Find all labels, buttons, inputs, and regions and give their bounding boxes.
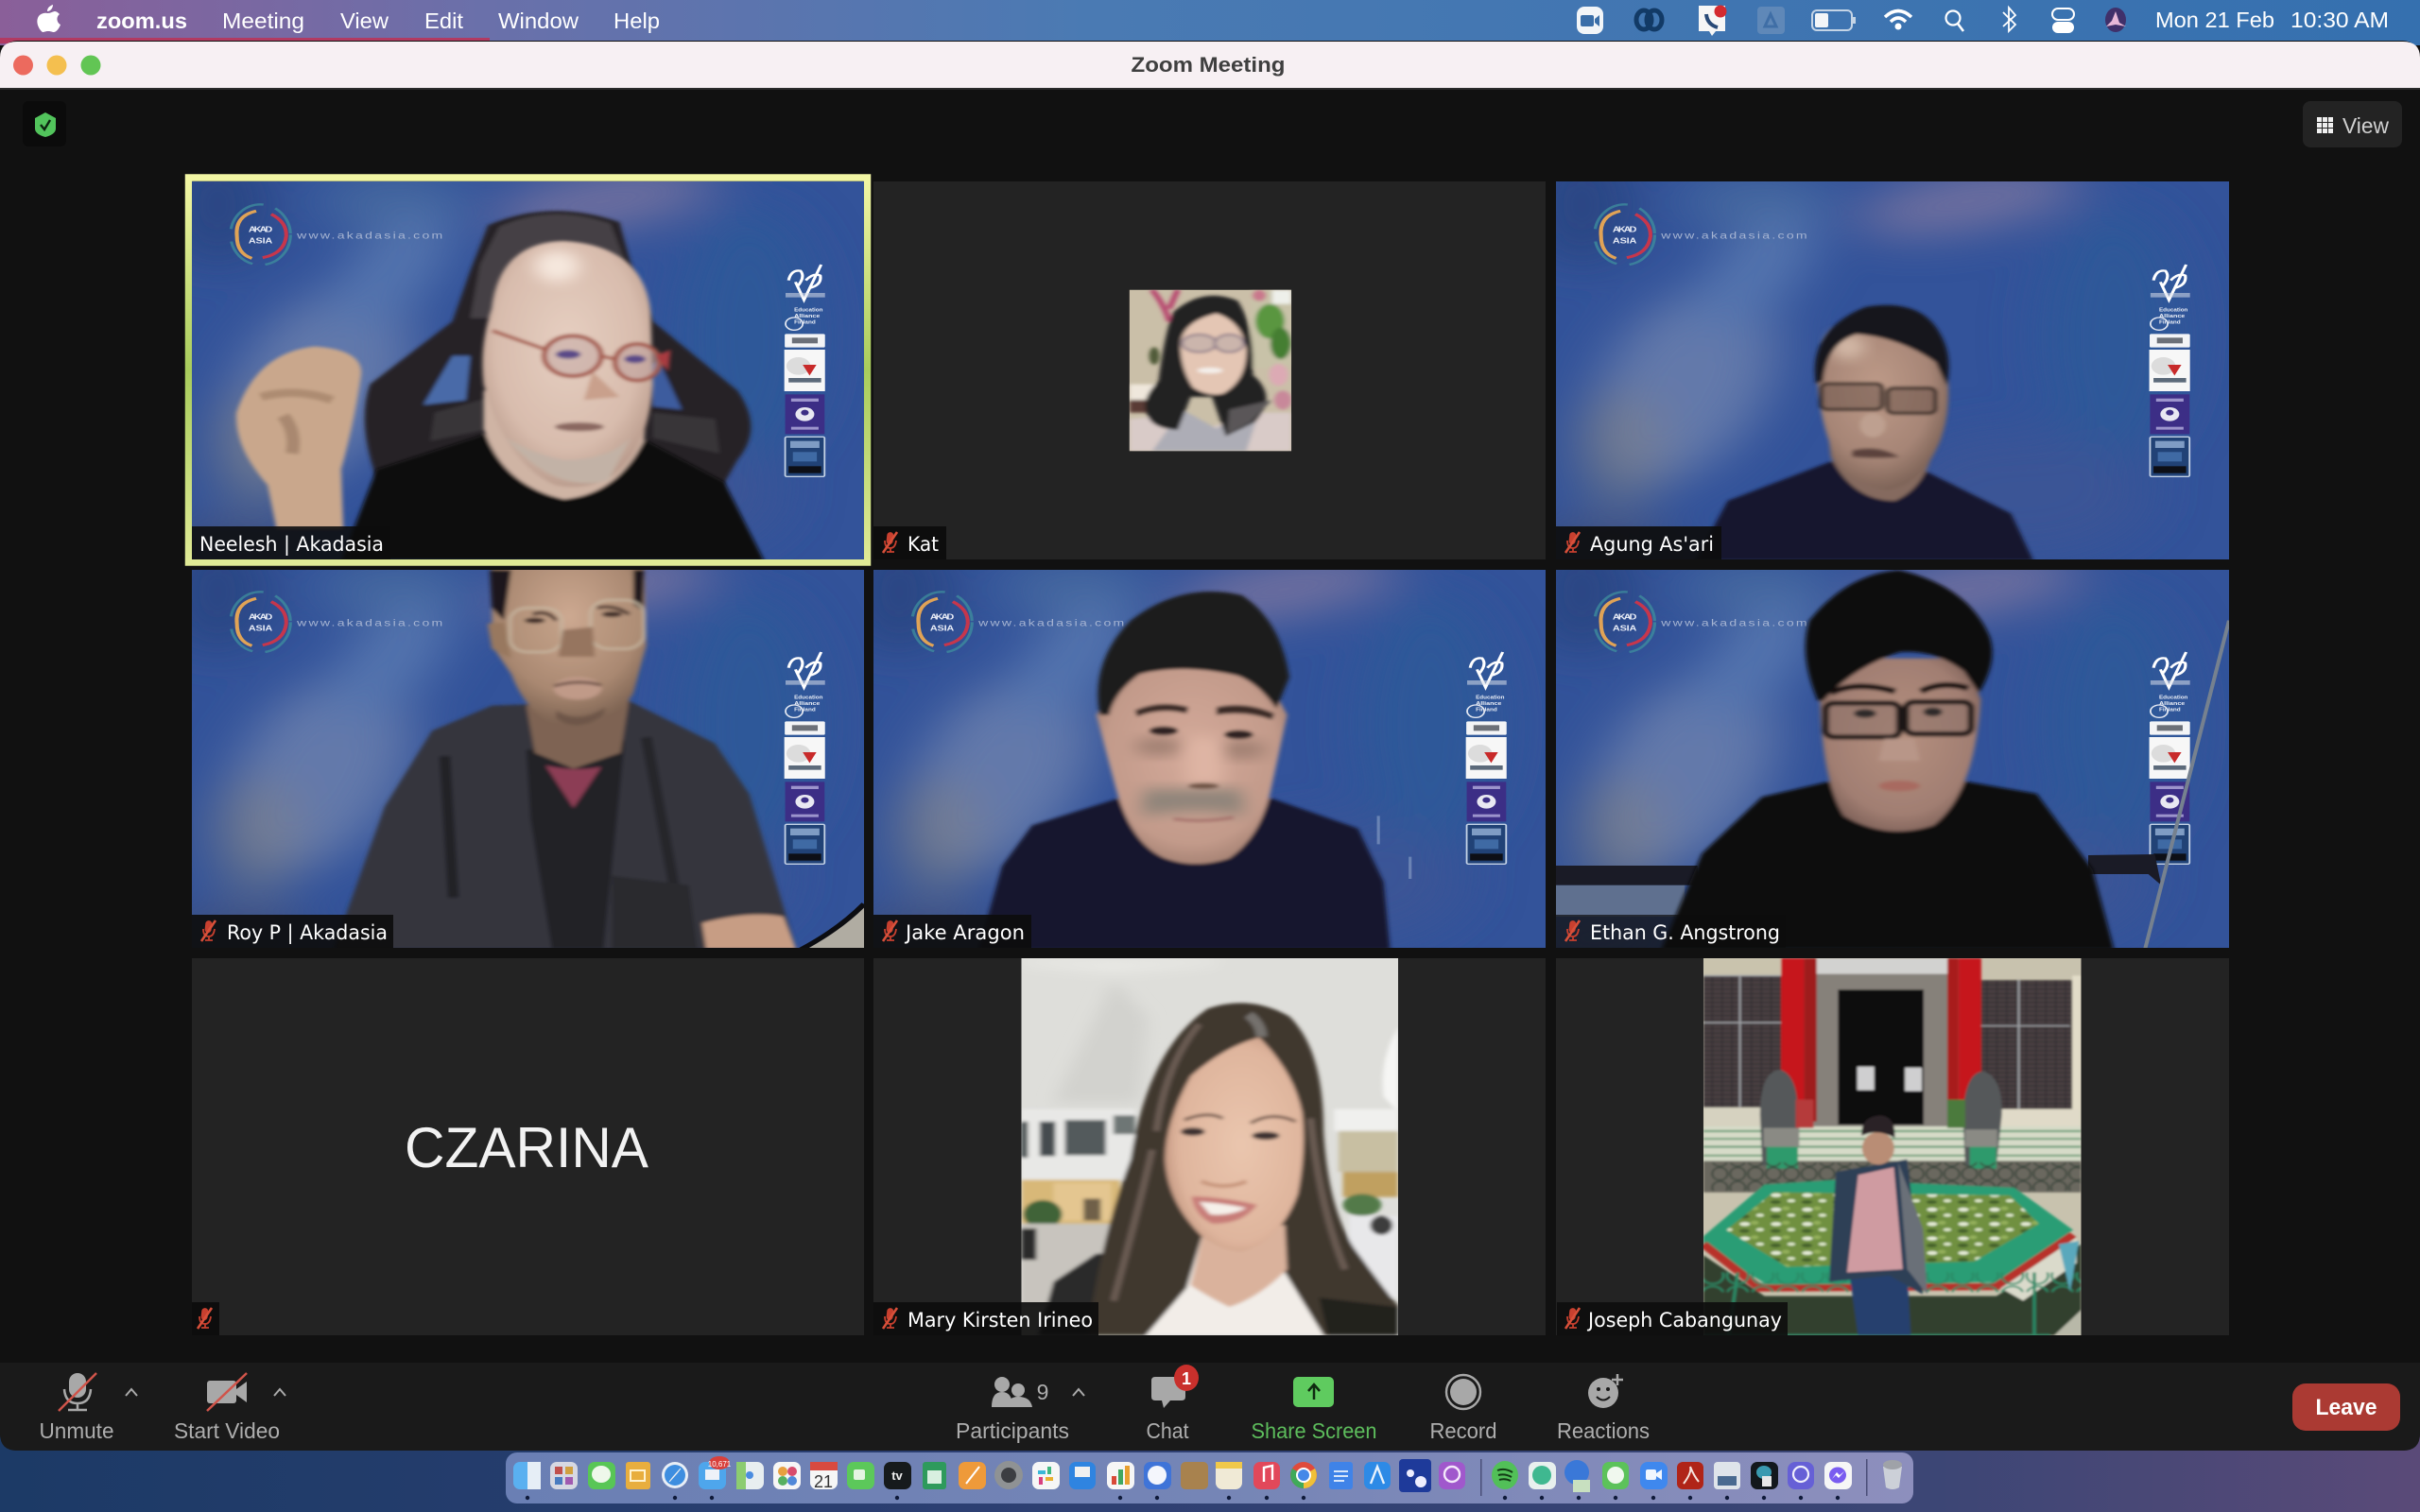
tile: Joseph	[1556, 955, 2229, 1338]
tile: Czarina (camera off)	[192, 958, 864, 1335]
name tag: Ethan G. Angstrong	[1590, 921, 1780, 944]
share screen control: Share Screen	[1252, 1418, 1376, 1443]
name tag	[1556, 526, 1721, 559]
video: Ethan: www.akadasia.com	[1660, 617, 1807, 628]
video: Agung: www.akadasia.com	[1660, 230, 1807, 241]
name tag	[1557, 1302, 1788, 1335]
photo: Mary	[1021, 958, 1398, 1335]
participants control: Participants	[956, 1418, 1069, 1443]
unmute control	[40, 1373, 137, 1443]
video: Agung: ASIA	[1613, 237, 1636, 246]
name tag	[873, 526, 946, 559]
chat control	[1146, 1365, 1199, 1443]
menu items	[96, 9, 660, 33]
desktop wallpaper	[0, 1418, 2420, 1512]
menu items: Window	[498, 9, 579, 33]
video: Agung: Finland	[2159, 319, 2181, 325]
chat control: 1	[1182, 1369, 1191, 1388]
active speaker border	[189, 178, 868, 562]
name tag: muted icon	[192, 1302, 219, 1335]
video: Roy: ASIA	[249, 625, 272, 633]
start video control	[174, 1373, 285, 1443]
tile: Roy	[145, 529, 869, 967]
view button: View	[2342, 113, 2389, 138]
video: Ethan: Education	[2159, 695, 2187, 700]
video: Jake: Education	[1476, 695, 1504, 700]
macOS menu bar	[0, 0, 2420, 45]
menu items: Help	[614, 9, 660, 33]
video: Joseph	[1556, 958, 2229, 1335]
participant name: CZARINA	[405, 1116, 648, 1179]
view button	[2303, 101, 2402, 147]
leave button: Leave	[2316, 1395, 2377, 1420]
video: Agung: AKAD	[1613, 226, 1636, 234]
video: Jake: AKAD	[930, 613, 954, 622]
title bar: Zoom Meeting	[1131, 53, 1286, 77]
name tag	[873, 915, 1031, 948]
name tag	[873, 1302, 1098, 1335]
video: Neelesh	[192, 181, 897, 559]
video: Kat	[873, 181, 1546, 559]
macOS dock	[506, 1452, 1913, 1503]
tile: Kat	[873, 180, 1546, 562]
video: Roy: Education	[794, 695, 822, 700]
menu items: Meeting	[222, 9, 304, 33]
video: Roy: www.akadasia.com	[296, 617, 442, 628]
video: Roy	[192, 570, 864, 948]
video: Roy: AKAD	[249, 613, 272, 622]
participants control	[956, 1377, 1084, 1443]
video: Neelesh: Alliance	[794, 314, 821, 319]
date and time: Mon 21 Feb	[2155, 8, 2274, 32]
menu items: Edit	[424, 9, 464, 33]
video: Neelesh: Education	[794, 307, 822, 313]
menu items: View	[340, 9, 389, 33]
menu items: zoom.us	[96, 9, 187, 33]
start video control: Start Video	[174, 1418, 280, 1443]
title bar	[0, 42, 2420, 90]
tile: Ethan	[1509, 529, 2234, 967]
name tag: Jake Aragon	[904, 921, 1025, 944]
name tag: Joseph Cabangunay	[1586, 1309, 1782, 1332]
icon: apple logo	[37, 5, 60, 32]
name tag	[192, 915, 393, 948]
video: Roy: Finland	[794, 707, 816, 713]
bottom toolbar	[0, 1363, 2420, 1451]
name tag: Kat	[908, 533, 939, 556]
tile: Mary	[873, 955, 1546, 1338]
video: Neelesh: ASIA	[249, 237, 272, 246]
tile: Jake	[826, 529, 1550, 967]
video: Ethan: Alliance	[2159, 701, 2185, 707]
name tag: Roy P | Akadasia	[227, 921, 388, 945]
name tag	[1556, 915, 1786, 948]
video: Neelesh: www.akadasia.com	[296, 230, 442, 241]
video: Neelesh: Finland	[794, 319, 816, 325]
video: Jake: ASIA	[930, 625, 954, 633]
video: Mary	[873, 958, 1546, 1335]
video: Ethan: ASIA	[1613, 625, 1636, 633]
video: Agung	[1556, 181, 2229, 559]
video: Ethan	[1556, 570, 2229, 948]
chat control: Chat	[1146, 1418, 1189, 1443]
tile: Agung	[1509, 142, 2234, 579]
name tag: Neelesh | Akadasia	[199, 533, 384, 557]
record control: Record	[1429, 1418, 1497, 1443]
dock badges and running indicators	[526, 1460, 1840, 1500]
video: Neelesh: AKAD	[249, 226, 272, 234]
date and time: 10:30 AM	[2290, 8, 2389, 32]
video: Ethan: AKAD	[1613, 613, 1636, 622]
reactions control	[1557, 1374, 1650, 1443]
name tag	[192, 526, 390, 559]
video: Jake: Finland	[1476, 707, 1497, 713]
icon: security shield	[23, 101, 66, 146]
video: Ethan: Finland	[2159, 707, 2181, 713]
dock icons	[513, 1456, 1902, 1496]
dock icons: tv	[891, 1469, 904, 1483]
dock icons: 21	[814, 1472, 833, 1491]
participants control: 9	[1037, 1380, 1048, 1404]
video: Jake	[873, 570, 1546, 948]
share screen control	[1252, 1377, 1376, 1443]
unmute control: Unmute	[40, 1418, 113, 1443]
video: Agung: Education	[2159, 307, 2187, 313]
name tag: Mary Kirsten Irineo	[908, 1309, 1093, 1332]
date and time	[2155, 8, 2389, 32]
video: Agung: Alliance	[2159, 314, 2185, 319]
name tag: Agung As'ari	[1590, 533, 1714, 556]
reactions control: Reactions	[1557, 1418, 1650, 1443]
dock badges and running indicators: 10,671	[708, 1460, 732, 1469]
video: Jake: www.akadasia.com	[977, 617, 1124, 628]
status bar icons	[1577, 6, 2126, 36]
video: Jake: Alliance	[1476, 701, 1502, 707]
leave button	[2292, 1383, 2400, 1431]
active speaker tile: Neelesh	[145, 142, 869, 579]
video: Roy: Alliance	[794, 701, 821, 707]
photo: Joseph	[1703, 958, 2082, 1335]
profile photo: Kat	[1129, 289, 1291, 452]
record control	[1429, 1375, 1497, 1443]
